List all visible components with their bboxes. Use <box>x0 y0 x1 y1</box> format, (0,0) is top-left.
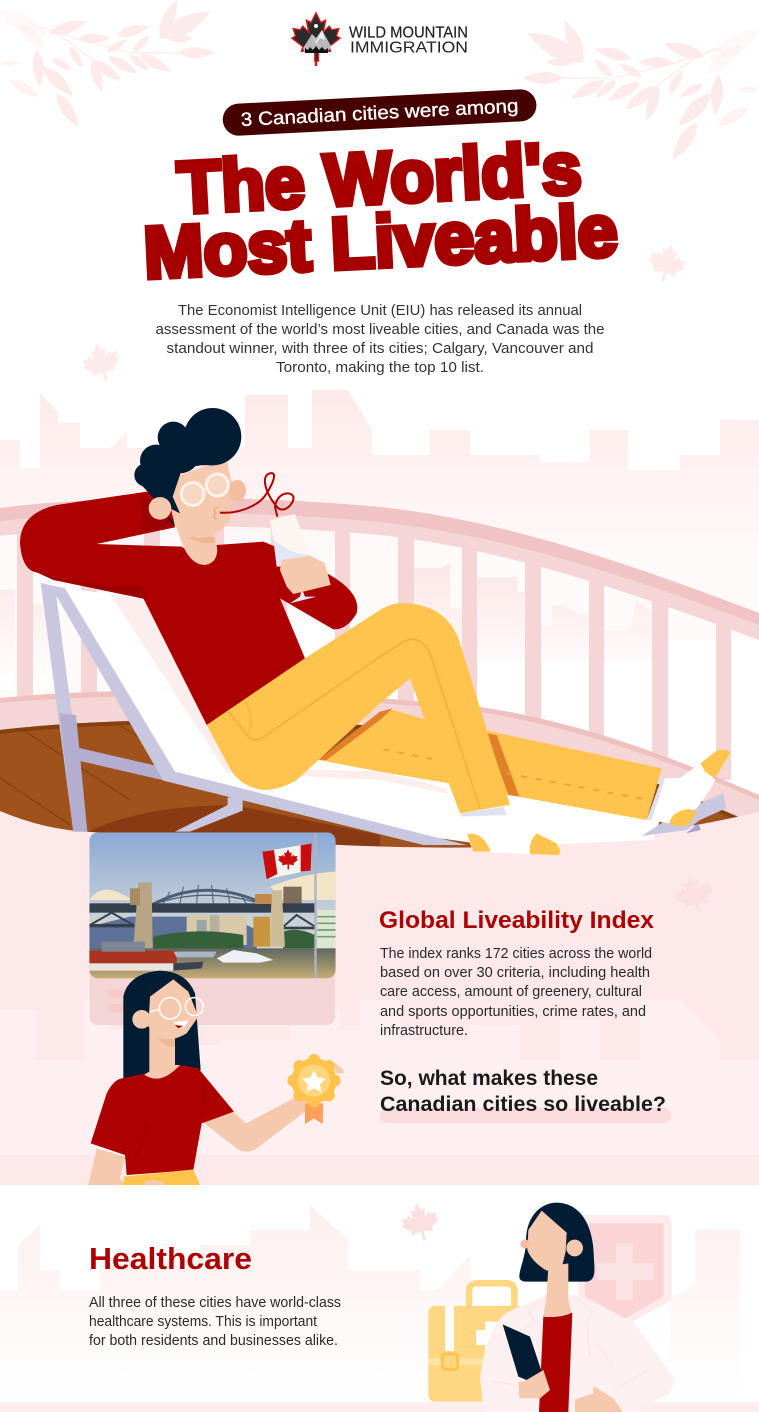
deck chair <box>41 583 726 847</box>
skyline in section <box>0 1000 759 1155</box>
question text <box>380 1066 666 1116</box>
hand <box>280 556 331 594</box>
t-shirt <box>91 1065 234 1175</box>
right arm <box>203 1095 312 1152</box>
far leg trousers <box>318 708 662 820</box>
glasses <box>150 998 203 1019</box>
highlight under question <box>380 1108 671 1123</box>
illustration: man relaxing on deck chair <box>20 408 730 855</box>
hand <box>144 1180 167 1190</box>
city skyline background <box>0 390 759 700</box>
decorative branch: top right <box>522 18 759 163</box>
hair <box>134 408 241 525</box>
shirt <box>539 1313 572 1412</box>
text: index description: care access, amount of greenery, cultural <box>380 984 642 1000</box>
skyline behind railing <box>0 563 652 690</box>
text: index description: infrastructure. <box>380 1023 468 1039</box>
intro text <box>156 302 604 376</box>
photo panel: Vancouver bridge and flag <box>89 832 336 1025</box>
text: index description: and sports opportunities, crime rates, and <box>380 1004 646 1020</box>
face <box>148 979 198 1039</box>
ear <box>149 497 171 520</box>
section: Healthcare <box>0 1185 759 1412</box>
mouth <box>173 1020 188 1028</box>
text: index description: The index ranks 172 cities across the world <box>380 946 652 962</box>
sweater <box>20 492 357 725</box>
question text: Canadian cities so liveable? <box>380 1092 666 1116</box>
text: index description: based on over 30 criteria, including health <box>380 965 650 981</box>
photo backing panel <box>90 953 335 1025</box>
trouser seam <box>228 639 480 808</box>
intro text: standout winner, with three of its cities; Calgary, Vancouver and <box>166 340 594 357</box>
near leg trousers <box>207 603 510 813</box>
intro text: assessment of the world’s most liveable cities, and Canada was the <box>156 321 604 338</box>
title: Most Liveable <box>142 190 619 294</box>
clipboard <box>503 1324 542 1380</box>
hair <box>123 971 201 1078</box>
heading: Global Liveability Index: Global Liveability Index <box>379 907 655 934</box>
tag pill: 3 Canadian cities were among <box>222 89 537 136</box>
illustration: doctor with medical bag and shield <box>428 1203 675 1412</box>
face <box>527 1211 567 1271</box>
railing balusters <box>17 525 731 780</box>
deck floor <box>0 720 759 860</box>
title <box>142 128 619 294</box>
section background: Global Liveability Index <box>0 811 759 1185</box>
text: healthcare description: healthcare systems. This is important <box>89 1314 317 1330</box>
text: index description <box>380 946 652 1039</box>
tag pill: 3 Canadian cities were among: 3 Canadian cities were among <box>240 96 519 131</box>
text: healthcare description: All three of these cities have world-class <box>89 1295 341 1311</box>
illustration: woman holding medal <box>88 971 344 1190</box>
ear <box>566 1240 583 1256</box>
neck <box>175 523 217 565</box>
logo wordmark: WILD MOUNTAIN <box>349 24 468 42</box>
icon: maple leaf decoration <box>644 240 690 286</box>
glasses <box>181 474 228 505</box>
hair <box>519 1203 594 1282</box>
face <box>172 458 245 538</box>
icon: maple leaf decoration <box>671 871 717 917</box>
icon: maple leaf with mountains <box>292 13 340 66</box>
photo <box>89 832 336 978</box>
bottom band <box>0 1402 759 1412</box>
sweater shadows <box>142 493 175 533</box>
hands <box>518 1370 550 1398</box>
text: healthcare description: for both residents and businesses alike. <box>89 1333 338 1349</box>
doctor coat <box>480 1295 675 1412</box>
intro text: The Economist Intelligence Unit (EIU) has released its annual <box>178 302 582 319</box>
icon: maple leaf decoration <box>397 1199 443 1245</box>
question text: So, what makes these <box>380 1066 598 1090</box>
bottom rail <box>0 691 759 826</box>
decorative branch: top left <box>0 0 215 130</box>
text: healthcare description <box>89 1295 341 1349</box>
mouth <box>214 507 218 519</box>
white section background <box>0 1185 759 1412</box>
skirt <box>123 1169 200 1185</box>
top rail <box>0 498 759 640</box>
icon: medical shield <box>577 1215 672 1325</box>
heading: Healthcare: Healthcare <box>89 1241 252 1276</box>
left shoe <box>460 805 560 855</box>
logo: Wild Mountain Immigration: IMMIGRATION <box>350 40 468 56</box>
left arm <box>88 1148 125 1185</box>
icon: medical bag <box>428 1283 528 1402</box>
glass <box>270 514 317 603</box>
skyline in section <box>0 1205 740 1400</box>
neck <box>143 1027 180 1080</box>
flag and pole <box>262 833 317 978</box>
bridge railing <box>0 498 759 826</box>
icon: maple leaf decoration <box>78 339 124 385</box>
neck <box>543 1263 572 1317</box>
medal <box>287 1054 344 1124</box>
right shoe <box>647 750 730 826</box>
logo: Wild Mountain Immigration <box>292 13 468 66</box>
title: The World's <box>176 128 583 229</box>
intro text: Toronto, making the top 10 list. <box>276 359 484 376</box>
straw <box>220 473 293 517</box>
